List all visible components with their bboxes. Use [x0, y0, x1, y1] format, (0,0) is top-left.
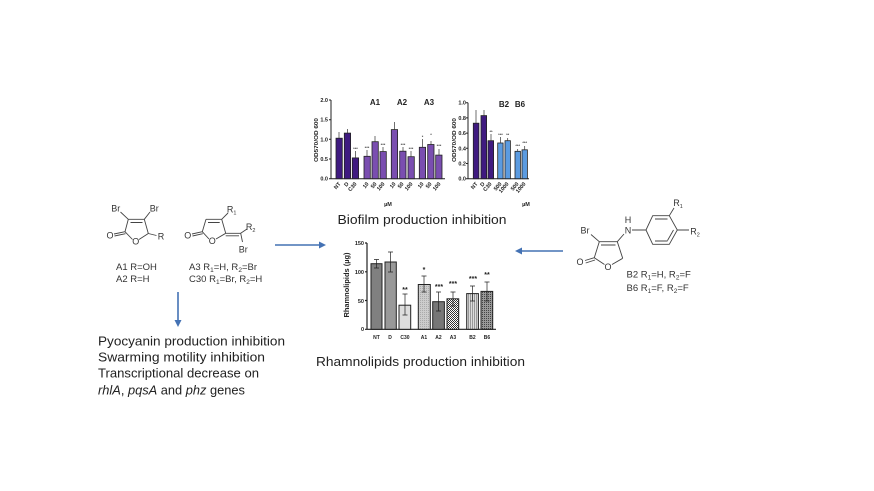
chemical structure: B2/B6	[576, 198, 700, 272]
rhamnolipids bar chart: 150	[355, 241, 364, 247]
compound labels A1/A2	[116, 262, 157, 285]
chemical structure: B2/B6: 1	[680, 204, 683, 210]
biofilm bar chart, A series: µM	[384, 202, 392, 208]
significance stars: **	[484, 272, 490, 279]
x tick labels: 50	[370, 181, 379, 190]
x tick labels: 50	[397, 181, 406, 190]
compound labels B2/B6: 1	[648, 288, 652, 295]
biofilm bar chart, B series: B6	[515, 100, 526, 109]
significance stars: *	[422, 134, 424, 139]
x tick labels: A2	[435, 335, 442, 341]
biofilm bar chart, B series	[452, 100, 530, 208]
rhamnolipids bar chart: 100	[355, 270, 364, 276]
chemical structure: B2/B6: R	[690, 226, 697, 236]
significance stars: ***	[409, 146, 414, 151]
x tick labels: 100	[404, 181, 415, 192]
compound labels B2/B6: =F	[677, 283, 689, 294]
x tick labels: C30	[400, 335, 410, 341]
compound labels B2/B6: 2	[674, 288, 678, 295]
arrow: right structure to rhamnolipids	[515, 248, 563, 254]
compound labels A1/A2: A2 R=H	[116, 274, 150, 285]
significance stars: ***	[401, 142, 406, 147]
x tick labels: NT	[373, 335, 380, 341]
significance stars: *	[423, 267, 426, 274]
compound labels B2/B6: 2	[676, 274, 680, 282]
compound labels A3/C30: 2	[246, 279, 250, 286]
x tick labels: 1000	[498, 181, 511, 195]
group labels: A1	[370, 98, 381, 107]
significance stars: ***	[437, 143, 442, 148]
chemical structure: A3/C30: O	[209, 236, 216, 246]
compound labels A3/C30: =Br	[242, 262, 257, 273]
significance stars: *	[430, 132, 432, 137]
x tick labels: D	[343, 181, 351, 188]
biofilm bar chart, A series: 0.5	[320, 157, 328, 163]
significance stars	[402, 267, 490, 294]
x tick labels: B6	[484, 335, 490, 341]
compound labels A3/C30	[189, 262, 262, 286]
x tick labels: NT	[333, 181, 343, 191]
significance stars: ***	[381, 142, 386, 147]
chemical structure: B2/B6: O	[576, 257, 584, 267]
x tick labels: 500	[510, 181, 521, 192]
chemical structure: A1/A2: Br	[111, 204, 120, 214]
effects text block: Transcriptional decrease on	[98, 366, 259, 381]
x tick labels: 10	[362, 181, 371, 190]
biofilm bar chart, A series: 2.0	[320, 98, 328, 104]
biofilm bar chart, A series: A2	[397, 98, 408, 107]
chemical structure: A1/A2: Br	[150, 204, 159, 214]
compound labels A3/C30: A3 R	[189, 262, 210, 273]
x tick labels: 500	[493, 181, 504, 192]
biofilm bar chart, A series	[314, 98, 445, 208]
compound labels B2/B6: =F, R	[651, 283, 674, 294]
rhamnolipids caption: Rhamnolipids production inhibition	[316, 354, 525, 369]
x tick labels: A3	[450, 335, 456, 341]
biofilm bar chart, B series: 0.0	[458, 177, 466, 183]
chemical structure: A1/A2: R	[158, 232, 165, 242]
chemical structure: A3/C30: R	[246, 222, 252, 232]
chemical structure: A1/A2: O	[132, 236, 139, 246]
compound labels A3/C30: 2	[238, 267, 242, 274]
compound labels A1/A2: A1 R=OH	[116, 262, 157, 273]
biofilm bar chart, B series: 0.8	[458, 116, 466, 122]
chemical structure: A1/A2	[106, 204, 165, 246]
significance stars	[489, 129, 527, 148]
chemical structure: B2/B6: N	[625, 226, 631, 236]
x tick labels: 50	[425, 181, 434, 190]
compound labels A3/C30: =H	[250, 274, 262, 285]
significance stars: ***	[498, 132, 503, 137]
biofilm bar chart, B series: 0.2	[458, 162, 466, 168]
compound labels B2/B6: =H, R	[651, 270, 676, 280]
chemical structure: A3/C30: R	[227, 204, 233, 214]
x tick labels: D	[479, 181, 487, 188]
chemical structure: B2/B6: Br	[580, 226, 590, 236]
x tick labels: A1	[421, 335, 427, 341]
compound labels A3/C30: =Br, R	[220, 274, 246, 285]
x tick labels: NT	[470, 181, 480, 191]
x tick labels: 10	[417, 181, 426, 190]
chemical structure: B2/B6: O	[604, 262, 612, 272]
significance stars: **	[402, 287, 408, 294]
chemical structure: A3/C30: O	[184, 230, 191, 240]
x tick labels	[470, 181, 528, 195]
x tick labels: 1000	[515, 181, 528, 195]
group labels: B2	[499, 100, 510, 109]
x tick labels: C30	[347, 181, 359, 193]
rhamnolipids bar chart: 0	[361, 327, 364, 333]
x tick labels: C30	[482, 181, 494, 193]
arrow: down to effects list	[174, 292, 182, 327]
compound labels A3/C30: =H, R	[214, 262, 238, 273]
compound labels B2/B6: =F	[679, 270, 691, 280]
chemical structure: A3/C30: 1	[233, 210, 236, 216]
rhamnolipids bar chart: 50	[358, 299, 364, 305]
biofilm caption: Biofilm production inhibition	[338, 212, 506, 227]
significance stars: ***	[435, 284, 443, 291]
biofilm bar chart, B series: 1.0	[458, 101, 466, 107]
significance stars: ***	[515, 143, 520, 148]
chemical structure: B2/B6: H	[625, 215, 631, 225]
compound labels B2/B6: B2 R	[626, 270, 648, 280]
significance stars	[353, 132, 442, 151]
biofilm bar chart, A series: 1.5	[320, 118, 328, 124]
compound labels A3/C30: 1	[216, 279, 220, 286]
significance stars: ***	[522, 140, 527, 145]
compound labels A3/C30: C30 R	[189, 274, 216, 285]
x tick labels: 100	[432, 181, 443, 192]
biofilm bar chart, A series: 0.0	[320, 177, 328, 183]
chemical structure: A1/A2: O	[106, 230, 114, 240]
x tick labels: 100	[376, 181, 387, 192]
chemical structure: A3/C30: Br	[239, 244, 248, 254]
significance stars: **	[506, 132, 510, 137]
compound labels B2/B6: B6 R	[626, 283, 648, 294]
x tick labels: 10	[389, 181, 398, 190]
x tick labels	[333, 181, 443, 193]
significance stars: ***	[469, 276, 477, 283]
effects text block	[98, 334, 285, 397]
compound labels A3/C30: 1	[210, 267, 214, 274]
arrow: left structures to rhamnolipids	[275, 242, 326, 248]
biofilm bar chart, B series: 0.4	[458, 146, 467, 152]
significance stars: **	[489, 129, 493, 134]
y axis title: Rhamnolipids (µg)	[344, 252, 351, 318]
significance stars: ***	[449, 281, 457, 288]
biofilm bar chart, A series: A3	[424, 98, 435, 107]
rhamnolipids bar chart	[344, 241, 496, 341]
x tick labels: D	[388, 335, 392, 341]
biofilm bar chart, A series: 1.0	[320, 137, 328, 143]
biofilm bar chart, B series: OD570/OD 600	[452, 118, 458, 162]
compound labels B2/B6	[626, 270, 691, 295]
significance stars: ***	[353, 146, 358, 151]
compound labels B2/B6: 1	[648, 274, 652, 282]
x tick labels: B2	[469, 335, 476, 341]
y axis title: OD570/OD 600	[314, 118, 320, 162]
significance stars: ***	[365, 145, 370, 150]
chemical structure: A3/C30	[184, 204, 255, 254]
effects text block: Pyocyanin production inhibition	[98, 334, 285, 349]
effects text block: Swarming motility inhibition	[98, 350, 265, 365]
chemical structure: B2/B6: 2	[697, 232, 700, 238]
effects text block: rhlA, pqsA and phz genes	[98, 382, 245, 397]
chemical structure: B2/B6: R	[673, 198, 680, 208]
chemical structure: A3/C30: 2	[252, 228, 255, 234]
biofilm bar chart, B series: 0.6	[458, 131, 466, 137]
biofilm bar chart, B series: µM	[522, 202, 530, 208]
x tick labels	[373, 335, 490, 341]
